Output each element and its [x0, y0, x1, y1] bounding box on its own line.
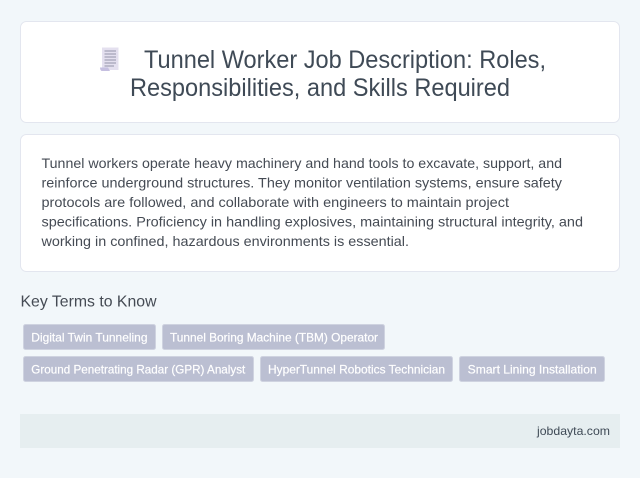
- chip: digital twin tunneling: Digital Twin Tunneling: [31, 330, 147, 344]
- chip: smart lining: Smart Lining Installation: [468, 362, 597, 376]
- chip: hypertunnel robotics: HyperTunnel Robotics Technician: [268, 362, 445, 376]
- chip: tunnel boring machine: [162, 324, 384, 350]
- description text: working in confined, hazardous environments is essential.: [40, 233, 409, 249]
- chip: ground penetrating radar: [24, 356, 254, 382]
- panel: title card: [20, 22, 620, 122]
- description text: specifications. Proficiency in handling explosives, maintaining structural integrity, and: [42, 214, 583, 230]
- chip: smart lining: [460, 356, 604, 382]
- heading: key terms: Key Terms to Know: [20, 294, 157, 311]
- icon: document scroll: [100, 48, 118, 71]
- description text: reinforce underground structures. They monitor ventilation systems, ensure safety: [42, 174, 562, 190]
- chip: ground penetrating radar: Ground Penetrating Radar (GPR) Analyst: [31, 362, 246, 376]
- chip: hypertunnel robotics: [260, 356, 452, 382]
- panel: description: [20, 134, 620, 272]
- footer bar: [20, 414, 620, 448]
- description text: Tunnel workers operate heavy machinery and hand tools to excavate, support, and: [42, 155, 562, 171]
- chip: digital twin tunneling: [24, 324, 156, 350]
- footer bar: jobdayta.com: [536, 424, 610, 438]
- description text: protocols are followed, and collaborate with engineers to maintain project: [42, 194, 509, 210]
- title: Tunnel Worker Job Description: Roles,: [144, 46, 546, 74]
- title: Responsibilities, and Skills Required: [130, 74, 510, 102]
- chip: tunnel boring machine: Tunnel Boring Machine (TBM) Operator: [170, 330, 378, 344]
